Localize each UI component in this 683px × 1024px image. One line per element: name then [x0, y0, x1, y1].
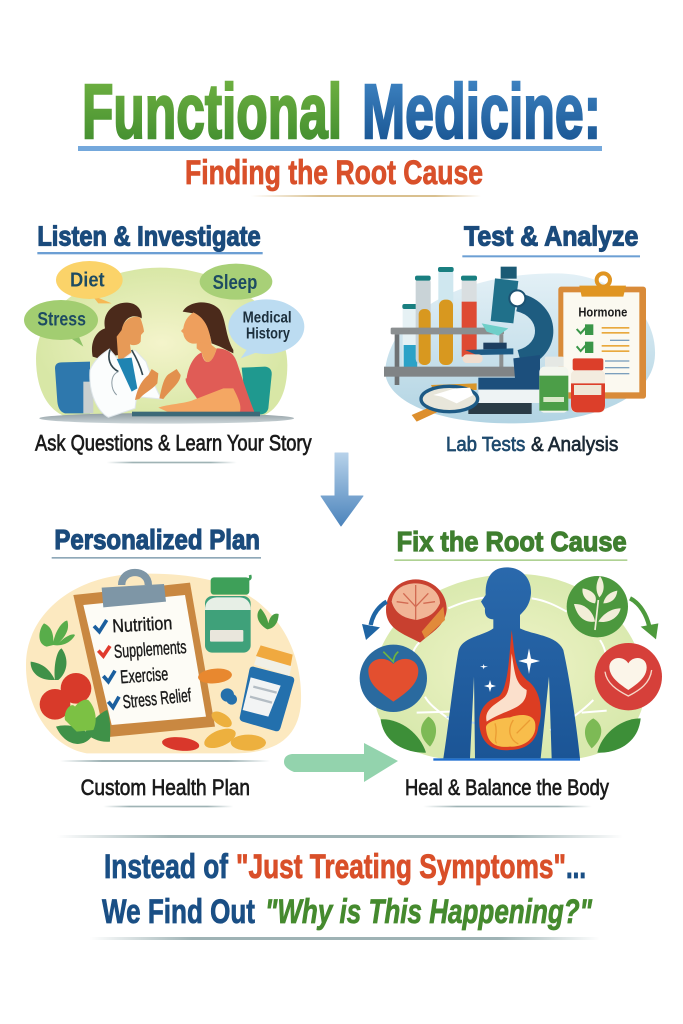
closing statement — [102, 848, 593, 931]
shadow — [60, 760, 270, 762]
closing statement: We Find Out — [102, 893, 255, 931]
table — [39, 413, 294, 424]
arrow: down — [321, 453, 363, 526]
speech bubble: medical history — [228, 299, 304, 358]
desk — [132, 412, 260, 416]
closing statement: "Why is This Happening?" — [265, 893, 593, 931]
clipboard checklist: Supplements — [113, 636, 187, 662]
clipboard checklist: Nutrition — [112, 612, 173, 636]
heading: fix the root cause: Fix the Root Cause — [397, 526, 627, 557]
caption: Lab Tests — [446, 434, 525, 456]
arrow: right — [284, 743, 398, 782]
patient — [158, 302, 255, 416]
clipboard checklist: Exercise — [119, 663, 169, 687]
green bottle — [539, 357, 568, 413]
heading: listen and investigate: Listen & Investigate — [37, 221, 261, 252]
caption: & Analysis — [531, 434, 618, 456]
icon: apple heart — [360, 645, 427, 712]
arrow: blue curve — [362, 602, 387, 640]
caption: Custom Health Plan — [81, 775, 250, 800]
red bottle — [571, 358, 605, 412]
clipboard: hormone: Hormone — [578, 306, 627, 320]
speech bubble: stress: Stress — [37, 310, 86, 331]
leaf — [257, 608, 279, 629]
clipboard checklist: Stress Relief — [122, 684, 193, 712]
closing statement: ... — [566, 848, 586, 886]
caption: Heal & Balance the Body — [405, 775, 609, 800]
background blob — [26, 574, 301, 753]
test tubes — [402, 267, 477, 368]
panel: personalized plan — [26, 524, 301, 807]
speech bubble: sleep — [200, 264, 272, 300]
closing statement: Instead of — [104, 848, 229, 886]
background blob — [36, 268, 287, 418]
speech bubble: stress — [24, 300, 98, 347]
caption — [446, 434, 618, 456]
heading: test and analyze: Test & Analyze — [464, 221, 638, 252]
digestive system — [479, 630, 541, 750]
person silhouette — [443, 567, 580, 758]
leaves — [381, 717, 641, 753]
background blob — [373, 574, 645, 759]
title: Functional — [82, 69, 342, 155]
icon: heart — [595, 643, 662, 710]
panel: listen and investigate — [24, 221, 312, 463]
rack — [384, 328, 516, 385]
bottom base line — [433, 758, 580, 761]
speech bubble: diet: Diet — [70, 270, 105, 292]
arrow: green curve — [630, 598, 658, 639]
sparkles — [480, 648, 540, 692]
icon: plant — [567, 576, 628, 637]
panel: fix the root cause — [360, 526, 662, 807]
icon: brain — [386, 579, 447, 643]
blue bottle — [240, 645, 294, 731]
microscope — [463, 267, 544, 414]
magnifying glass — [412, 383, 478, 422]
speech bubble: diet — [56, 261, 123, 303]
subtitle: Finding the Root Cause — [185, 154, 483, 192]
background blob — [385, 273, 655, 423]
closing statement: "Just Treating Symptoms" — [236, 848, 566, 886]
caption: Ask Questions & Learn Your Story — [35, 431, 312, 456]
tomatoes and greens — [31, 621, 110, 744]
heading: personalized plan: Personalized Plan — [54, 524, 260, 555]
speech bubble: sleep: Sleep — [213, 272, 257, 294]
chairs — [55, 362, 272, 414]
white connecting ring — [411, 597, 607, 730]
panel: test and analyze — [384, 221, 655, 456]
pills — [161, 667, 266, 753]
doctor — [90, 303, 181, 417]
clipboard checklist — [73, 572, 215, 737]
speech bubble: medical history: History — [246, 325, 290, 342]
speech bubble: medical history: Medical — [243, 309, 292, 326]
clipboard: hormone — [558, 273, 646, 399]
green bottle — [205, 575, 251, 653]
